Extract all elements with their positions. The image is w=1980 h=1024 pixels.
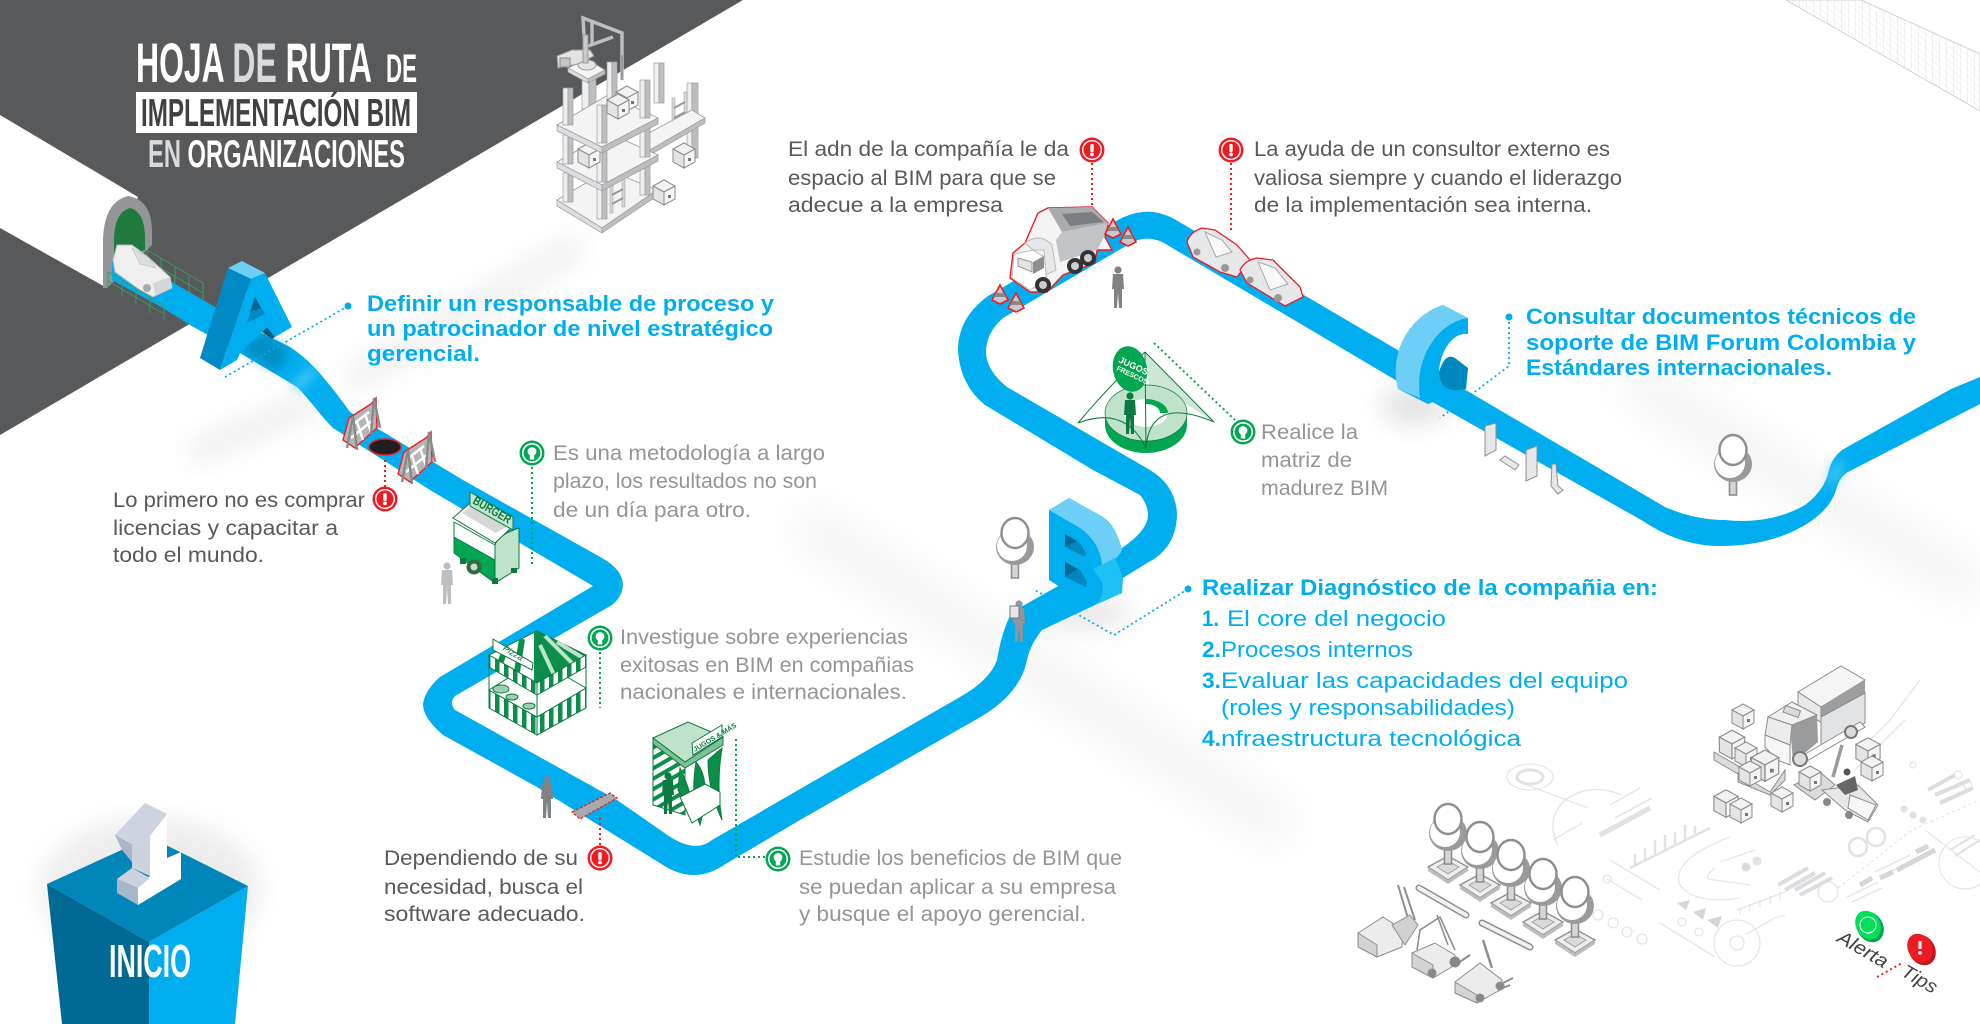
dotted leader tip 3 xyxy=(736,739,766,857)
text block: dependiendo: necesidad, busca el xyxy=(384,876,583,899)
letter A xyxy=(200,261,292,370)
text block: diagnostico: nfraestructura tecnológica xyxy=(1221,726,1522,751)
legend red token xyxy=(1902,929,1941,970)
road barricades xyxy=(343,398,435,484)
icon: tip matriz xyxy=(1230,420,1256,444)
text block: investigue: nacionales e internacionales. xyxy=(620,681,907,704)
icon: alert 1 xyxy=(372,486,398,512)
traffic cones xyxy=(992,219,1136,312)
street furniture xyxy=(1485,423,1563,494)
dotted leader alert 1 xyxy=(384,460,386,488)
text block: consultor: valiosa siempre y cuando el liderazgo xyxy=(1254,167,1622,190)
person by truck xyxy=(1112,266,1124,308)
green ring with sign: FRESCOS xyxy=(1115,365,1149,386)
number 1 xyxy=(115,803,181,905)
text block: diagnostico: Procesos internos xyxy=(1221,637,1413,662)
person near ramp xyxy=(541,776,553,818)
text block: Lo primero: licencias y capacitar a xyxy=(113,517,338,540)
dot B xyxy=(1184,586,1192,592)
text block: diagnostico: 1. xyxy=(1202,606,1219,631)
top slab xyxy=(557,95,658,147)
legend labels: Alerta xyxy=(1833,927,1892,973)
text block: metodologia: de un día para otro. xyxy=(553,499,751,522)
letter B xyxy=(1049,498,1123,605)
crashed cars xyxy=(1187,228,1303,306)
text block: diagnostico: 2. xyxy=(1202,637,1221,662)
tent stand: JUGOS & MÁS xyxy=(691,721,738,754)
text block: diagnostico: 4. xyxy=(1202,726,1221,751)
title: EN ORGANIZACIONES xyxy=(148,133,405,176)
inicio block xyxy=(40,803,260,1024)
letter C xyxy=(1396,305,1468,404)
building under construction xyxy=(557,18,705,233)
forklifts xyxy=(1358,885,1513,1003)
road shadow under A xyxy=(240,332,290,372)
heading A xyxy=(367,291,775,366)
legend: Tips xyxy=(1898,961,1941,999)
text block: estudie: y busque el apoyo gerencial. xyxy=(799,903,1086,926)
text block: metodologia: plazo, los resultados no son xyxy=(553,470,817,493)
text block: estudie xyxy=(799,847,1122,926)
pizza stand: Pizza xyxy=(501,643,525,663)
delivery truck and cargo xyxy=(1714,666,1883,823)
speed bump xyxy=(572,793,617,819)
title: IMPLEMENTACIÓN BIM xyxy=(141,91,411,135)
pizza stand xyxy=(489,631,586,735)
heading A: Definir un responsable de proceso y xyxy=(367,291,775,316)
text block: estudie: se puedan aplicar a su empresa xyxy=(799,876,1116,899)
dotted leader alert 2 xyxy=(599,818,601,846)
text block: Lo primero: todo el mundo. xyxy=(113,544,264,567)
dotted leader alert 3 xyxy=(1091,163,1093,207)
road segment: letter B to right edge xyxy=(958,212,1980,590)
road segment: tunnel to letter B xyxy=(112,262,1095,875)
dot A xyxy=(344,302,352,310)
crane xyxy=(557,18,622,109)
heading C: Consultar documentos técnicos de xyxy=(1526,304,1916,329)
back columns xyxy=(654,63,659,103)
heading A: gerencial. xyxy=(367,341,480,366)
legend xyxy=(1833,906,1941,999)
text block: matriz: Realice la xyxy=(1261,421,1358,444)
text block: matriz xyxy=(1261,421,1388,500)
heading C: Estándares internacionales. xyxy=(1526,355,1832,380)
text block: diagnostico xyxy=(1202,575,1658,751)
icon: alert 3 xyxy=(1080,138,1104,162)
icon: alert 4 xyxy=(1218,138,1244,162)
rails xyxy=(1419,888,1530,947)
icon: tip 1 xyxy=(520,440,544,466)
text block: consultor xyxy=(1254,138,1622,217)
title xyxy=(136,31,417,176)
soft ground shadows xyxy=(190,243,1980,832)
burger kiosk xyxy=(453,492,519,584)
text block: diagnostico: Realizar Diagnóstico de la compañia en: xyxy=(1202,575,1658,600)
dotted leader tip 1 xyxy=(531,467,533,564)
car in tunnel xyxy=(108,245,203,320)
person grey xyxy=(441,562,453,604)
green ring with sign: JUGOS xyxy=(1117,355,1150,377)
dotted leader A xyxy=(225,306,348,377)
person near B xyxy=(1010,600,1025,642)
dotted leader alert 4 xyxy=(1230,163,1232,233)
background dark triangle xyxy=(0,0,743,435)
dotted leader tip 2 xyxy=(599,652,601,708)
dotted leader C xyxy=(1440,317,1509,418)
five pins row xyxy=(1428,804,1595,957)
pin right xyxy=(1714,435,1752,495)
text block: matriz: matriz de xyxy=(1261,449,1352,472)
text block: adn: adecue a la empresa xyxy=(788,194,1003,217)
text block: diagnostico: El core del negocio xyxy=(1227,606,1446,631)
text block: matriz: madurez BIM xyxy=(1261,477,1388,500)
inicio label: INICIO xyxy=(109,935,191,987)
text block: investigue xyxy=(620,626,914,704)
text block: dependiendo: Dependiendo de su xyxy=(384,847,578,870)
title: DE xyxy=(386,47,417,91)
bottom slab xyxy=(557,170,657,228)
text block: metodologia xyxy=(553,442,825,522)
technical schematic background xyxy=(1507,680,1980,966)
text block: adn: El adn de la compañía le da xyxy=(788,138,1069,161)
icon: tip 2 xyxy=(588,626,612,650)
text block: estudie: Estudie los beneficios de BIM que xyxy=(799,847,1122,870)
dot C xyxy=(1506,314,1512,320)
text block: diagnostico: Evaluar las capacidades del equipo xyxy=(1221,668,1628,693)
tunnel xyxy=(0,115,152,288)
text block: Lo primero xyxy=(113,489,365,567)
dotted leader matriz xyxy=(1154,343,1235,420)
burger kiosk: BURGER xyxy=(470,493,514,527)
text block: Lo primero: Lo primero no es comprar xyxy=(113,489,365,512)
text block: dependiendo: software adecuado. xyxy=(384,903,585,926)
text block: consultor: La ayuda de un consultor externo es xyxy=(1254,138,1610,161)
text block: investigue: Investigue sobre experiencias xyxy=(620,626,908,649)
heading A: un patrocinador de nivel estratégico xyxy=(367,316,773,341)
icon: tip 3 xyxy=(766,846,790,872)
dotted leader B xyxy=(1033,589,1188,635)
text block: adn xyxy=(788,138,1069,217)
heading C: soporte de BIM Forum Colombia y xyxy=(1526,330,1917,355)
green ring with sign xyxy=(1078,343,1214,453)
dump truck xyxy=(1010,207,1112,293)
tent stand xyxy=(653,721,738,825)
pin near B xyxy=(996,518,1034,578)
text block: consultor: de la implementación sea interna. xyxy=(1254,194,1592,217)
text block: dependiendo xyxy=(384,847,585,926)
title: HOJA DE RUTA xyxy=(136,31,372,94)
text block: metodologia: Es una metodología a largo xyxy=(553,442,825,465)
top right fence xyxy=(1786,0,1980,111)
text block: diagnostico: (roles y responsabilidades) xyxy=(1221,695,1515,720)
text block: adn: espacio al BIM para que se xyxy=(788,167,1056,190)
text block: diagnostico: 3. xyxy=(1202,668,1221,693)
text block: investigue: exitosas en BIM en compañias xyxy=(620,654,914,677)
middle slab xyxy=(557,133,658,185)
road bend highlight xyxy=(290,365,318,394)
road bend highlight right xyxy=(1826,458,1845,490)
legend green token xyxy=(1850,906,1889,947)
heading C xyxy=(1526,304,1917,380)
icon: alert 2 xyxy=(588,846,612,870)
